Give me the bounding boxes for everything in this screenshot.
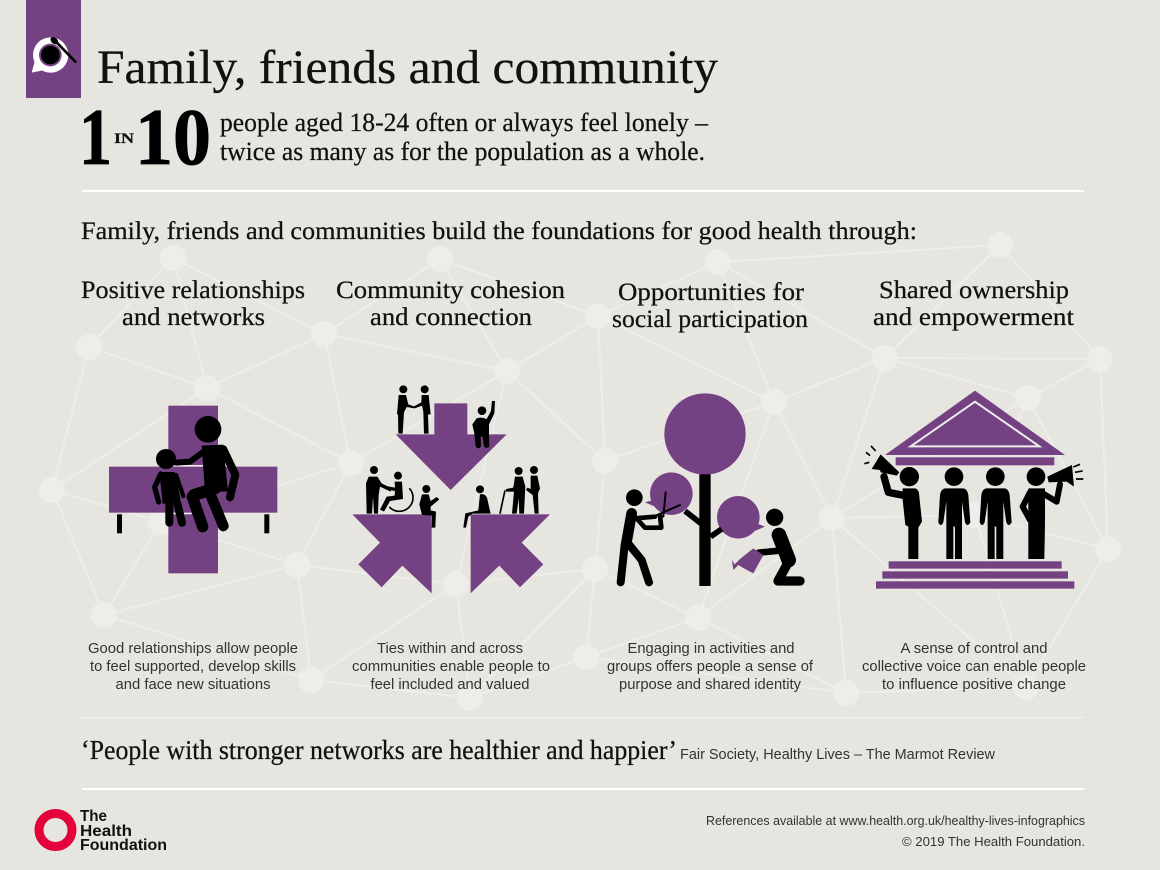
heading: shared ownership (873, 277, 1074, 331)
description: Ties within and across (377, 641, 523, 657)
icon: purple tab with plate and spoon speech bubble (26, 0, 81, 98)
panel: shared ownership (862, 277, 1086, 693)
statistic description: people aged 18-24 often or always feel lonely – (220, 108, 709, 137)
logo: The Health Foundation: Foundation (80, 837, 167, 854)
heading: social participation: social participation (612, 306, 809, 333)
icon: adult and child on a bench over a cross (109, 406, 277, 573)
description: collective voice can enable people (862, 659, 1086, 675)
heading: community cohesion (336, 277, 566, 331)
description: feel included and valued (370, 677, 530, 693)
description: Good relationships allow people (88, 641, 298, 657)
heading: community cohesion: Community cohesion (336, 277, 566, 304)
logo: The Health Foundation: The (80, 808, 107, 825)
description (607, 641, 814, 693)
panel: community cohesion (336, 277, 566, 693)
icon: tree with gardeners (621, 393, 800, 586)
heading: positive relationships: and networks (122, 304, 265, 331)
description: purpose and shared identity (619, 677, 802, 693)
title: Family, friends and community (97, 41, 718, 94)
statistic: 1 in 10: IN (114, 131, 134, 147)
description: to feel supported, develop skills (90, 659, 296, 675)
description: Engaging in activities and (628, 641, 794, 657)
quote: ‘People with stronger networks are healthier and happier’ (81, 735, 677, 765)
logo: The Health Foundation (39, 808, 167, 854)
heading: social participation: Opportunities for (618, 279, 805, 306)
statistic description: twice as many as for the population as a whole. (220, 137, 705, 166)
description: and face new situations (116, 677, 270, 693)
intro sentence: Family, friends and communities build the foundations for good health through: (81, 218, 917, 245)
references: References available at www.health.org.uk/healthy-lives-infographics (706, 813, 1085, 828)
statistic: 1 in 10: 1 (79, 94, 112, 182)
panel: social participation (607, 279, 814, 693)
heading: positive relationships: Positive relationships (81, 277, 305, 304)
statistic description (220, 108, 709, 166)
description (862, 641, 1086, 693)
heading: social participation (612, 279, 809, 333)
statistic: 1 in 10 (79, 94, 211, 182)
heading: shared ownership: Shared ownership (879, 277, 1069, 304)
icon: building with people and megaphones (864, 391, 1083, 589)
heading: positive relationships (81, 277, 305, 331)
logo: The Health Foundation: Health (80, 823, 132, 840)
panel: positive relationships (81, 277, 305, 693)
heading: community cohesion: and connection (370, 304, 533, 331)
description: to influence positive change (882, 677, 1066, 693)
copyright: © 2019 The Health Foundation. (902, 834, 1085, 849)
quote source: Fair Society, Healthy Lives – The Marmot Review (680, 747, 996, 763)
icon: three converging arrows with people (352, 385, 550, 593)
description (88, 641, 298, 693)
description: A sense of control and (900, 641, 1048, 657)
description: groups offers people a sense of (607, 659, 814, 675)
description: communities enable people to (352, 659, 550, 675)
description (352, 641, 550, 693)
heading: shared ownership: and empowerment (873, 304, 1074, 331)
statistic: 1 in 10: 10 (135, 94, 211, 182)
